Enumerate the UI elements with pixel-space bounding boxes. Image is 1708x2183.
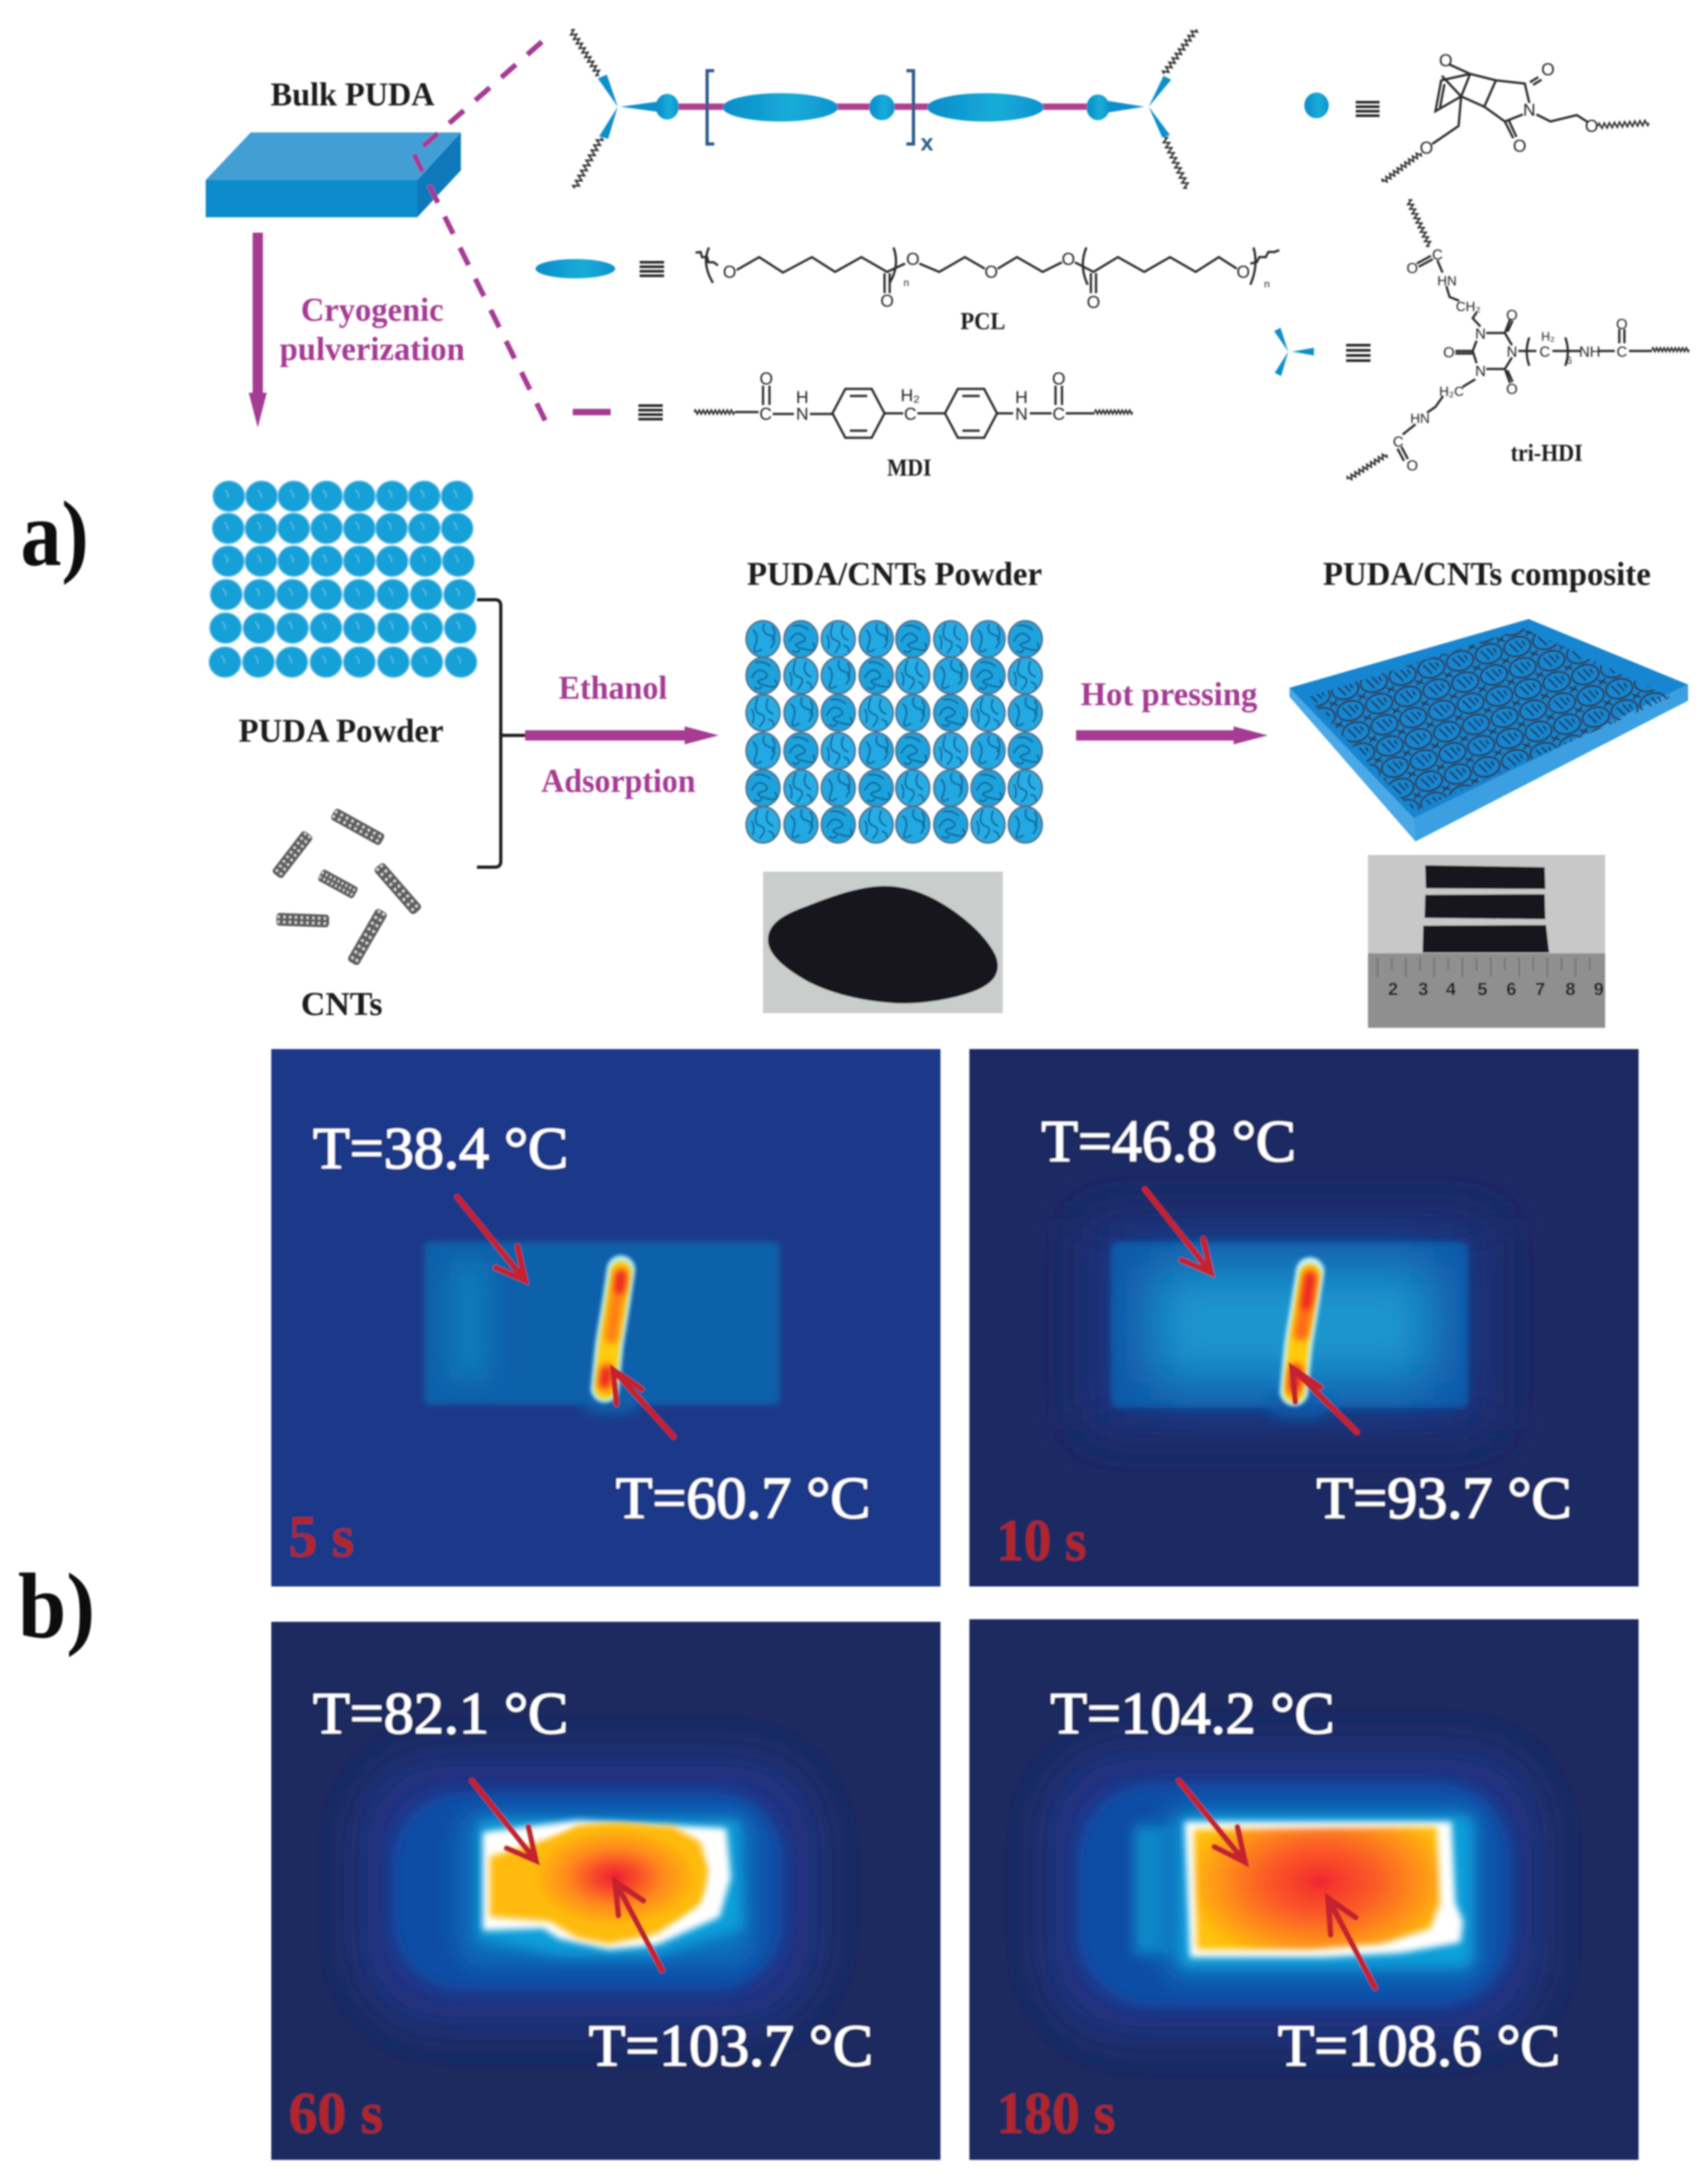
- legend: tri-HDI structure: O: [1506, 381, 1518, 397]
- legend: tri-HDI structure: N: [1475, 363, 1486, 379]
- PUDA powder grid: [209, 481, 477, 678]
- temperature labels: 180 s: T=104.2 °C: [1050, 1680, 1335, 1746]
- icon: carbon nanotubes: [271, 807, 422, 966]
- legend: PCL structure: O: [1236, 262, 1250, 282]
- polymer network schematic: x: [921, 129, 933, 156]
- thermal image: 60 s: [271, 1622, 940, 2160]
- heading: PUDA/CNTs Powder: PUDA/CNTs Powder: [747, 556, 1042, 593]
- temperature labels: 180 s: T=108.6 °C: [1278, 2013, 1560, 2078]
- photo: composite strips and ruler: 3: [1418, 979, 1428, 999]
- legend: tri-HDI structure: HN: [1437, 274, 1457, 289]
- photo: composite strips and ruler: [1368, 855, 1605, 1028]
- legend: tri-HDI structure: C: [1393, 433, 1403, 450]
- legend: tri-HDI structure: O: [1616, 316, 1628, 332]
- legend: furan-maleimide adduct: [1304, 51, 1649, 184]
- legend: furan-maleimide adduct: O: [1513, 136, 1527, 156]
- photo: black powder pile: [763, 872, 1003, 1013]
- arrows: 10 s measurement points: [1145, 1189, 1357, 1432]
- temperature labels: 180 s: [1050, 1680, 1560, 2078]
- temperature labels: 5 s: T=60.7 °C: [616, 1465, 870, 1531]
- photo: composite strips and ruler: 5: [1477, 979, 1488, 999]
- legend: PCL structure: O: [906, 249, 920, 269]
- temperature labels: 5 s: T=38.4 °C: [313, 1115, 568, 1181]
- legend: tri-HDI structure: O: [1443, 344, 1455, 361]
- photo: composite strips and ruler: 7: [1535, 979, 1545, 999]
- icon: bulk PUDA block: [206, 132, 461, 217]
- legend: MDI structure: H₂: [901, 386, 920, 405]
- label: a): a): [21, 483, 89, 586]
- legend: tri-HDI structure: C: [1432, 246, 1443, 263]
- photo: composite strips and ruler: 9: [1594, 979, 1604, 999]
- temperature labels: 5 s: [313, 1115, 870, 1531]
- temperature labels: 10 s: T=46.8 °C: [1041, 1108, 1296, 1174]
- legend: MDI structure: H: [1015, 388, 1028, 407]
- legend: MDI structure: H: [796, 388, 809, 407]
- legend: tri-HDI structure: 6: [1567, 355, 1572, 366]
- legend: MDI structure: O: [1052, 369, 1066, 388]
- legend: PCL structure: O: [723, 262, 737, 282]
- legend: PCL structure: O: [1086, 292, 1101, 312]
- legend: PCL structure: [535, 247, 1279, 312]
- label: CNTs: CNTs: [301, 986, 382, 1023]
- photo: composite strips and ruler: 4: [1446, 979, 1456, 999]
- legend: MDI structure: N: [1015, 404, 1028, 424]
- legend: tri-HDI structure: [1274, 199, 1689, 481]
- legend: PCL structure: O: [1061, 249, 1075, 269]
- legend: PCL structure: n: [904, 278, 909, 289]
- label: b): b): [18, 1555, 95, 1658]
- legend: furan-maleimide adduct: N: [1523, 100, 1536, 120]
- legend: PCL structure: O: [984, 262, 998, 282]
- legend: MDI structure: [573, 369, 1133, 438]
- legend: MDI structure: C: [904, 404, 917, 424]
- legend: PCL structure: O: [880, 291, 894, 310]
- photo: composite strips and ruler: 2: [1388, 979, 1398, 999]
- legend: furan-maleimide adduct: O: [1419, 138, 1434, 157]
- legend: tri-HDI structure: C: [1617, 343, 1627, 360]
- legend: tri-HDI structure: N: [1507, 343, 1517, 360]
- thermal image: 5 s: [271, 1049, 940, 1586]
- label: PCL: PCL: [960, 308, 1005, 335]
- legend: tri-HDI structure: C: [1540, 343, 1550, 360]
- arrow: ethanol adsorption: [525, 726, 719, 744]
- heading: PUDA/CNTs composite: PUDA/CNTs composite: [1323, 556, 1651, 593]
- temperature labels: 60 s: T=103.7 °C: [589, 2013, 873, 2078]
- photo: composite strips and ruler: 8: [1565, 979, 1576, 999]
- panel a: fabrication schematic: [21, 28, 1689, 1028]
- label: PUDA Powder: PUDA Powder: [238, 713, 444, 750]
- time label: 60 s: 60 s: [289, 2080, 383, 2146]
- arrow: hot pressing: [1076, 726, 1268, 744]
- temperature labels: 10 s: [1041, 1108, 1572, 1531]
- legend: tri-HDI structure: N: [1475, 325, 1486, 342]
- time label: 180 s: 180 s: [996, 2080, 1115, 2146]
- label: Adsorption: Adsorption: [541, 763, 696, 800]
- legend: tri-HDI structure: HN: [1410, 411, 1430, 426]
- arrows: 60 s measurement points: [472, 1781, 662, 1970]
- arrow: cryogenic pulverization: [249, 233, 267, 427]
- legend: furan-maleimide adduct: O: [1541, 60, 1555, 79]
- legend: PCL structure: n: [1264, 279, 1270, 290]
- legend: tri-HDI structure: O: [1407, 260, 1418, 276]
- label: MDI: MDI: [887, 454, 931, 481]
- icon: composite slab: [1290, 619, 1688, 841]
- arrows: 180 s measurement points: [1179, 1781, 1375, 1988]
- legend: MDI structure: O: [759, 369, 773, 388]
- temperature labels: 60 s: T=82.1 °C: [313, 1680, 568, 1746]
- time label: 10 s: 10 s: [996, 1507, 1086, 1573]
- legend: tri-HDI structure: O: [1506, 307, 1518, 323]
- legend: furan-maleimide adduct: O: [1585, 116, 1599, 136]
- label: Cryogenic pulverization: pulverization: [280, 331, 465, 368]
- label: tri-HDI: tri-HDI: [1511, 440, 1583, 467]
- legend: tri-HDI structure: CH₂: [1456, 300, 1480, 314]
- label: Cryogenic pulverization: [280, 292, 465, 368]
- dashed zoom lines: [414, 42, 545, 420]
- legend: tri-HDI structure: NH: [1579, 343, 1601, 360]
- thermal image: 180 s: [969, 1619, 1639, 2160]
- legend: MDI structure: C: [1052, 404, 1065, 424]
- PUDA/CNTs powder grid: [746, 621, 1042, 843]
- legend: tri-HDI structure: O: [1407, 457, 1418, 474]
- heading: Bulk PUDA: Bulk PUDA: [271, 76, 435, 113]
- legend: MDI structure: C: [759, 404, 772, 424]
- temperature labels: 10 s: T=93.7 °C: [1317, 1465, 1572, 1531]
- label: Hot pressing: Hot pressing: [1081, 676, 1257, 713]
- time label: 5 s: 5 s: [289, 1504, 354, 1569]
- legend: MDI structure: N: [796, 404, 809, 424]
- bracket joining powder and CNTs: [477, 600, 525, 867]
- polymer network schematic: [569, 28, 1198, 190]
- thermal image: 10 s: [969, 1049, 1639, 1586]
- label: Cryogenic pulverization: Cryogenic: [301, 292, 444, 328]
- label: Ethanol: Ethanol: [559, 670, 667, 706]
- panel b: thermal images: [18, 1049, 1639, 2160]
- legend: tri-HDI structure: H₂C: [1439, 384, 1464, 399]
- temperature labels: 60 s: [313, 1680, 873, 2078]
- legend: tri-HDI structure: H₂: [1541, 330, 1555, 344]
- arrows: 5 s measurement points: [457, 1197, 674, 1437]
- legend: furan-maleimide adduct: O: [1439, 51, 1453, 70]
- photo: composite strips and ruler: 6: [1506, 979, 1516, 999]
